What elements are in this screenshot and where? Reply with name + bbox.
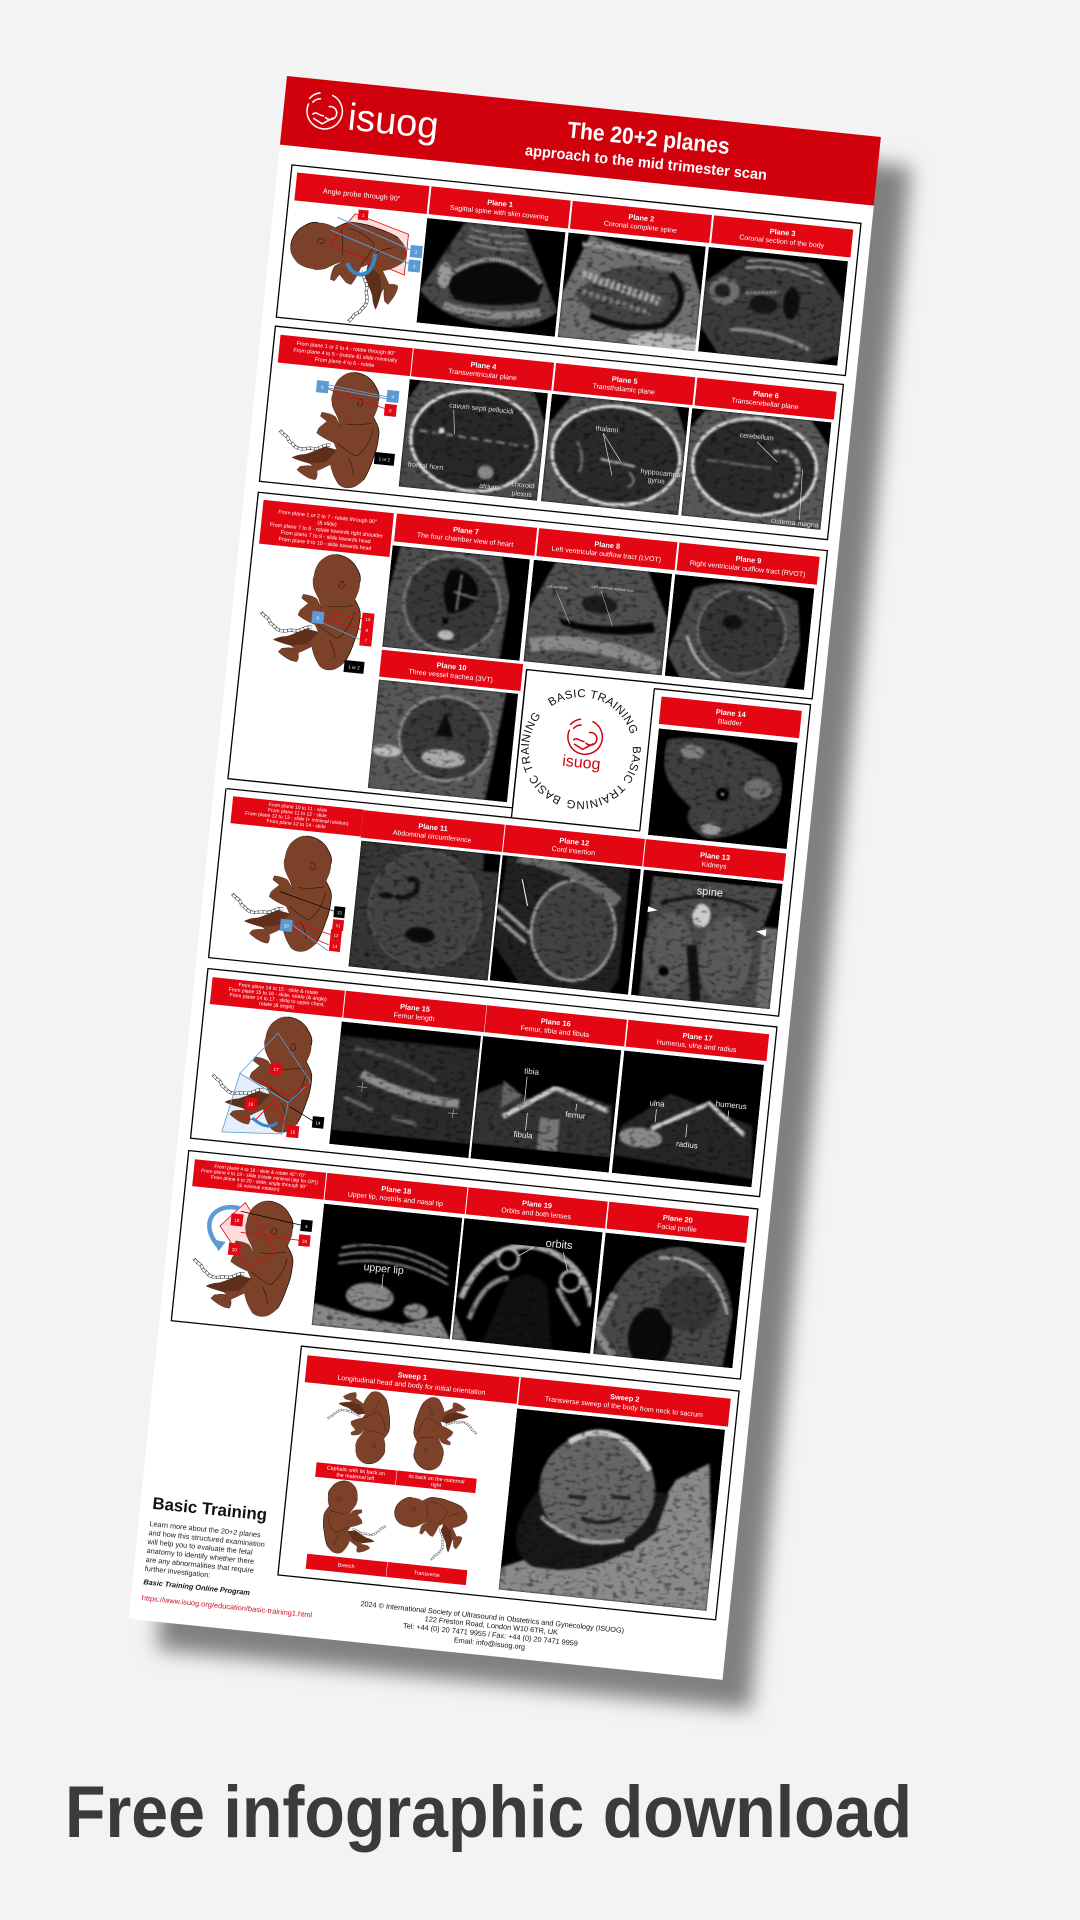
- bottom caption: Free infographic download: [65, 1772, 912, 1853]
- footer: Tel: +44 (0) 20 7471 9955 / Fax: +44 (0) 20 7471 9959: [403, 1621, 578, 1648]
- plane 13 ultrasound: [631, 870, 782, 1009]
- left heading: From plane 10 to 11 - slide: [268, 802, 328, 814]
- plane 4 heading: Transventricular plane: [448, 368, 517, 382]
- plane 20 heading: Plane 20: [662, 1213, 693, 1225]
- fetus cephalic left: [324, 1387, 393, 1466]
- circular text: BASIC TRAINING: [567, 747, 641, 810]
- plane 17 ultrasound: humerus: [715, 1099, 747, 1111]
- left heading: From plane 4 to 5 - (rotate &) slide minimally: [293, 348, 398, 364]
- panel: sweeps: [286, 1355, 731, 1611]
- left heading: From plane 1 or 2 to 7 - rotate through 90°: [278, 509, 377, 526]
- plane 14 heading: Plane 14: [715, 707, 747, 719]
- left heading: From plane 4 to 19 - slide (rotate minimal (dip for OP)): [201, 1168, 319, 1186]
- plane 8 heading: [536, 528, 677, 570]
- icon: isuog logo: [305, 92, 344, 131]
- plane 15 heading: Plane 15: [400, 1002, 430, 1014]
- left heading: (& slide): [317, 520, 337, 528]
- heading: Basic Training: [152, 1494, 268, 1524]
- plane 18 heading: Upper lip, nostrils and nasal tip: [347, 1191, 443, 1208]
- plane 4 ultrasound: cavum septi pellucidi: [449, 402, 514, 416]
- fetus diagram: 10: [365, 617, 371, 622]
- plane 16 ultrasound: [470, 1036, 622, 1172]
- fetus transverse: [390, 1494, 469, 1563]
- plane 11 heading: Abdominal circumference: [392, 830, 472, 845]
- plane 17 ultrasound: radius: [676, 1139, 698, 1151]
- plane 2 heading: [570, 201, 712, 243]
- plane 15 ultrasound: [329, 1022, 481, 1158]
- panel: section 4: [217, 796, 786, 1010]
- plane 6 heading: Transcerebellar plane: [731, 397, 799, 411]
- plane 1 ultrasound: [416, 218, 566, 337]
- plane 5 heading: Plane 5: [611, 374, 638, 386]
- fetus diagram: [227, 829, 352, 956]
- plane 6 ultrasound: cerebellum: [739, 432, 774, 443]
- fetus diagram: 4: [391, 394, 395, 400]
- plane 13 heading: Kidneys: [701, 861, 727, 871]
- plane 9 heading: [677, 543, 820, 585]
- fetus diagram: 15: [290, 1129, 296, 1135]
- plane 6 heading: Plane 6: [753, 389, 779, 400]
- fetus diagram: [284, 203, 426, 328]
- left heading: From plane 15 to 16 - slide, rotate (& angle): [228, 987, 327, 1003]
- plane 13 ultrasound: spine: [696, 885, 724, 900]
- sweep 2 heading: Transverse sweep of the body from neck to sacrum: [544, 1396, 703, 1419]
- plane 12 heading: Plane 12: [559, 836, 590, 848]
- fetus diagram: 12: [333, 933, 339, 938]
- plane 11 ultrasound: [348, 840, 500, 981]
- plane 19 heading: [466, 1187, 608, 1228]
- plane 8 heading: Left ventricular outflow tract (LVOT): [551, 546, 661, 564]
- fetus diagram: 13: [337, 910, 343, 916]
- plane 7 heading: [394, 514, 537, 556]
- plane 10 heading: Plane 10: [436, 660, 467, 672]
- plane 8 ultrasound: Left ventricle outflow tract: [591, 585, 635, 593]
- plane 7 ultrasound: [382, 545, 530, 661]
- poster: [129, 76, 881, 1680]
- plane 5 ultrasound: gyrus: [647, 477, 665, 486]
- plane 13 heading: Plane 13: [700, 850, 730, 862]
- panel: section 2: [266, 335, 837, 537]
- sweep 2 heading: [518, 1377, 731, 1427]
- left heading: [210, 977, 345, 1018]
- plane 3 heading: Coronal section of the body: [739, 234, 825, 250]
- plane 10 ultrasound: [368, 680, 518, 802]
- plane 13 heading: [643, 839, 786, 881]
- plane 7 heading: The four chamber view of heart: [416, 532, 514, 549]
- logo wordmark: isuog: [346, 97, 441, 148]
- paragraph: are any abnormalities that require: [145, 1555, 254, 1575]
- plane 16 ultrasound: femur: [565, 1110, 586, 1121]
- plane 14 heading: Bladder: [717, 718, 743, 728]
- poster shadow: [157, 106, 911, 1710]
- panel: basic training badge: [520, 689, 641, 810]
- fetus diagram: 1 or 2: [378, 456, 391, 463]
- left heading: rotate (& angle): [259, 1001, 295, 1011]
- plane 17 ultrasound: ulna: [649, 1098, 666, 1109]
- panel: section 3: [235, 500, 820, 831]
- plane 18 ultrasound: upper lip: [363, 1261, 404, 1277]
- fetus diagram: [256, 547, 380, 674]
- plane 17 heading: Humerus, ulna and radius: [656, 1039, 737, 1054]
- plane 5 ultrasound: [541, 394, 690, 516]
- plane 12 ultrasound: [490, 855, 641, 995]
- header band: [280, 76, 881, 206]
- plane 3 heading: [711, 215, 853, 257]
- fetus diagram: 4: [305, 1224, 308, 1229]
- left heading: [278, 335, 413, 376]
- plane 1 heading: Sagittal spine with skin covering: [449, 205, 549, 222]
- plane 9 ultrasound: [664, 574, 814, 690]
- wordmark red: isuog: [561, 753, 601, 774]
- plane 8 ultrasound: Left ventricle: [546, 584, 568, 590]
- left heading: From plane 14 to 17 - slide to upper chest,: [229, 992, 325, 1008]
- left heading: [294, 173, 430, 214]
- position labels top: the maternal left: [336, 1472, 375, 1482]
- panel: section 1: [283, 173, 853, 372]
- plane 19 ultrasound: [452, 1218, 602, 1354]
- plane 10 heading: Three vessel trachea (3VT): [408, 669, 493, 684]
- paragraph: Learn more about the 20+2 planes: [149, 1519, 261, 1539]
- plane 18 ultrasound: [312, 1204, 462, 1340]
- fetus diagram: 5: [321, 385, 324, 390]
- paragraph: anatomy to identify whether there: [146, 1546, 255, 1566]
- fetus diagram: 20: [232, 1247, 238, 1253]
- plane 17 ultrasound: [612, 1050, 764, 1188]
- icon: isuog logo red: [566, 718, 604, 756]
- panel: plane 14: [647, 696, 802, 849]
- sweep 1 heading: Sweep 1: [397, 1370, 428, 1382]
- left heading: From plane 11 to 12 - slide: [268, 807, 327, 819]
- sweep 2 ultrasound: [498, 1408, 725, 1611]
- plane 17 heading: [626, 1020, 769, 1061]
- fetus diagram: 8: [316, 615, 320, 621]
- left heading: [259, 500, 394, 557]
- position labels top: its back on the maternal: [408, 1474, 465, 1485]
- position labels bottom: Breech: [337, 1562, 355, 1570]
- fetus diagram: 10: [283, 923, 289, 929]
- fetus diagram: 16: [248, 1101, 254, 1107]
- circular text: BASIC TRAINING: [520, 712, 561, 804]
- plane 8 ultrasound: [524, 560, 672, 676]
- plane 20 ultrasound: [593, 1232, 745, 1368]
- fetus diagram: 1 or 2: [348, 664, 360, 671]
- plane 4 ultrasound: plexus: [511, 490, 533, 499]
- sweep 1 heading: Longitudinal head and body for initial orientation: [337, 1375, 486, 1397]
- left heading: Angle probe through 90°: [323, 186, 401, 203]
- plane 6 ultrasound: cisterna magna: [771, 518, 819, 530]
- plane 16 ultrasound: tibia: [524, 1066, 540, 1077]
- plane 6 ultrasound: [681, 408, 832, 530]
- plane 16 ultrasound: fibula: [513, 1130, 534, 1141]
- left heading: From plane 12 to 13 - slide (+ minimal rotation): [245, 811, 349, 827]
- plane 7 heading: Plane 7: [453, 525, 479, 536]
- plane 16 heading: Femur, tibia and fibula: [520, 1025, 589, 1039]
- left heading: From plane 4 to 20 - slide, angle through 90°: [210, 1174, 307, 1190]
- plane 3 ultrasound: [698, 247, 848, 366]
- plane 2 heading: Coronal complete spine: [603, 220, 677, 235]
- circular text: BASIC TRAINING: [548, 689, 638, 734]
- plane 19 heading: Plane 19: [522, 1198, 552, 1210]
- panel: section frames: [147, 165, 861, 1620]
- plane 18 heading: [324, 1173, 467, 1214]
- plane 4 ultrasound: frontal horn: [408, 461, 444, 472]
- paragraph: further investigation:: [144, 1564, 211, 1579]
- plane 4 heading: [411, 348, 554, 391]
- fetus diagram: 7: [364, 638, 368, 643]
- plane 16 heading: [484, 1005, 627, 1046]
- plane 11 heading: [361, 810, 505, 852]
- plane 19 ultrasound: orbits: [545, 1238, 574, 1252]
- fetus diagram: 19: [302, 1239, 308, 1244]
- fetus diagram: [207, 1010, 334, 1142]
- plane 4 ultrasound: [398, 379, 548, 501]
- plane 9 heading: Plane 9: [735, 554, 762, 565]
- plane 12 heading: Cord insertion: [551, 846, 595, 857]
- position labels top: Cephalic with its back on: [327, 1465, 385, 1477]
- fetus diagram: 6: [389, 408, 392, 413]
- left heading: From plane 14 to 15 - slide & rotate: [238, 982, 318, 996]
- plane 4 ultrasound: choroid: [511, 481, 535, 490]
- plane 5 ultrasound: thalami: [595, 425, 619, 435]
- left heading: [192, 1159, 326, 1200]
- fetus diagram: [275, 365, 403, 492]
- fetus diagram: 17: [273, 1067, 279, 1072]
- fetus diagram: 2: [415, 249, 418, 255]
- fetus breech: [320, 1479, 390, 1558]
- plane 6 heading: [695, 377, 837, 420]
- left heading: (& minimal rotation): [237, 1183, 280, 1193]
- footer: 2024 © International Society of Ultrasound in Obstetrics and Gynecology (ISUOG): [360, 1599, 624, 1635]
- plane 3 heading: Plane 3: [769, 227, 796, 238]
- plane 20 heading: [606, 1202, 749, 1243]
- plane 20 heading: Facial profile: [657, 1223, 697, 1234]
- plane 16 heading: Plane 16: [540, 1016, 571, 1028]
- sweep 2 heading: Sweep 2: [610, 1392, 640, 1404]
- fetus diagram: 1: [362, 213, 365, 218]
- fetus diagram: 14: [332, 944, 338, 949]
- plane 5 ultrasound: hyppocampal: [640, 468, 683, 479]
- plane 17 heading: Plane 17: [682, 1031, 713, 1043]
- footer: Email: info@isuog.org: [454, 1635, 526, 1651]
- panel: section 6: [178, 1159, 749, 1376]
- paragraph: will help you to evaluate the fetal: [146, 1537, 253, 1557]
- footer: [357, 1599, 624, 1661]
- left heading: [230, 796, 363, 837]
- position labels bottom: Transverse: [413, 1570, 440, 1579]
- circular text: [520, 689, 641, 810]
- plane 19 heading: Orbits and both lenses: [501, 1207, 572, 1221]
- fetus diagram: 11: [335, 923, 341, 928]
- text block: basic training: [140, 1494, 323, 1620]
- position labels bottom: [306, 1554, 467, 1585]
- plane 14 heading: [659, 696, 802, 738]
- position labels top: [315, 1462, 477, 1493]
- title: The 20+2 planes: [566, 116, 731, 159]
- position labels top: right: [430, 1482, 442, 1489]
- fetus diagram: 18: [234, 1218, 240, 1223]
- plane 12 heading: [503, 825, 645, 866]
- fetus diagram: 9: [365, 628, 369, 633]
- plane 15 heading: Femur length: [393, 1012, 435, 1023]
- plane 5 heading: [553, 363, 695, 405]
- plane 14 ultrasound: [648, 728, 798, 849]
- link: https://www.isuog.org/education/basic-training1.html: [141, 1593, 313, 1620]
- fetus cephalic right: [410, 1396, 480, 1475]
- fetus diagram: 14: [315, 1120, 321, 1126]
- plane 15 heading: [343, 991, 487, 1032]
- left heading: From plane 7 to 9 - slide towards head: [280, 530, 371, 545]
- program name: Basic Training Online Program: [143, 1577, 251, 1597]
- plane 18 heading: Plane 18: [381, 1184, 412, 1196]
- subtitle: approach to the mid trimester scan: [524, 142, 768, 184]
- plane 11 heading: Plane 11: [418, 821, 448, 833]
- plane 8 heading: Plane 8: [594, 539, 621, 551]
- plane 2 heading: Plane 2: [628, 212, 655, 224]
- plane 10 heading: [379, 650, 523, 691]
- sweep 1 heading: [305, 1355, 519, 1404]
- plane 5 heading: Transthalamic plane: [592, 383, 655, 397]
- plane 9 heading: Right ventricular outflow tract (RVOT): [689, 560, 806, 579]
- plane 4 ultrasound: atrium: [479, 483, 499, 492]
- paragraph: and how this structured examination: [148, 1528, 265, 1549]
- plane 2 ultrasound: [558, 232, 706, 352]
- fetus diagram: [189, 1194, 314, 1321]
- panel: section 5: [197, 977, 769, 1187]
- plane 1 heading: [429, 186, 571, 228]
- plane 4 heading: Plane 4: [470, 360, 498, 371]
- footer: 122 Freston Road, London W10 6TR, UK: [424, 1614, 559, 1637]
- left heading: From plane 9 to 10 - slide towards head: [278, 537, 372, 552]
- plane 1 heading: Plane 1: [487, 198, 513, 209]
- left heading: From plane 4 to 18 - slide & rotate 45°-70°: [214, 1164, 306, 1179]
- left heading: From plane 1 or 2 to 4 - rotate through 90°: [296, 341, 396, 357]
- left heading: From plane 4 to 6 - rotate: [314, 357, 375, 369]
- left heading: From plane 7 to 8 - rotate towards right shoulder: [270, 522, 383, 540]
- fetus diagram: 3: [413, 264, 416, 269]
- left heading: From plane 12 to 14 - slide: [266, 818, 326, 830]
